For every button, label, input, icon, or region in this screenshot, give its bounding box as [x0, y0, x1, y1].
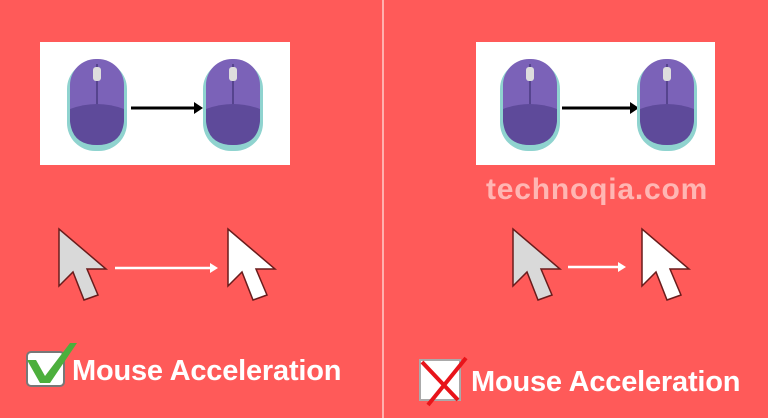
arrow: white right — [568, 262, 626, 272]
arrow — [131, 102, 203, 114]
icon: white cursor left — [228, 229, 275, 300]
icon: checkbox — [27, 343, 77, 386]
divider — [382, 0, 384, 418]
panel: right mouse box — [476, 42, 715, 165]
arrow: white left — [115, 263, 218, 273]
watermark: technoqia.com — [486, 173, 708, 206]
icon: mouse 1 — [67, 59, 127, 151]
label right: Mouse Acceleration — [471, 366, 740, 398]
icon: mouse 1 — [500, 59, 560, 151]
icon: crossbox — [420, 358, 466, 405]
icon: mouse 2 — [637, 59, 697, 151]
arrow — [562, 102, 639, 114]
label left: Mouse Acceleration — [72, 355, 341, 387]
icon: gray cursor right — [513, 229, 560, 300]
icon: mouse 2 — [203, 59, 263, 151]
icon: gray cursor left — [59, 229, 106, 300]
icon: white cursor right — [642, 229, 689, 300]
panel: left mouse box — [40, 42, 290, 165]
